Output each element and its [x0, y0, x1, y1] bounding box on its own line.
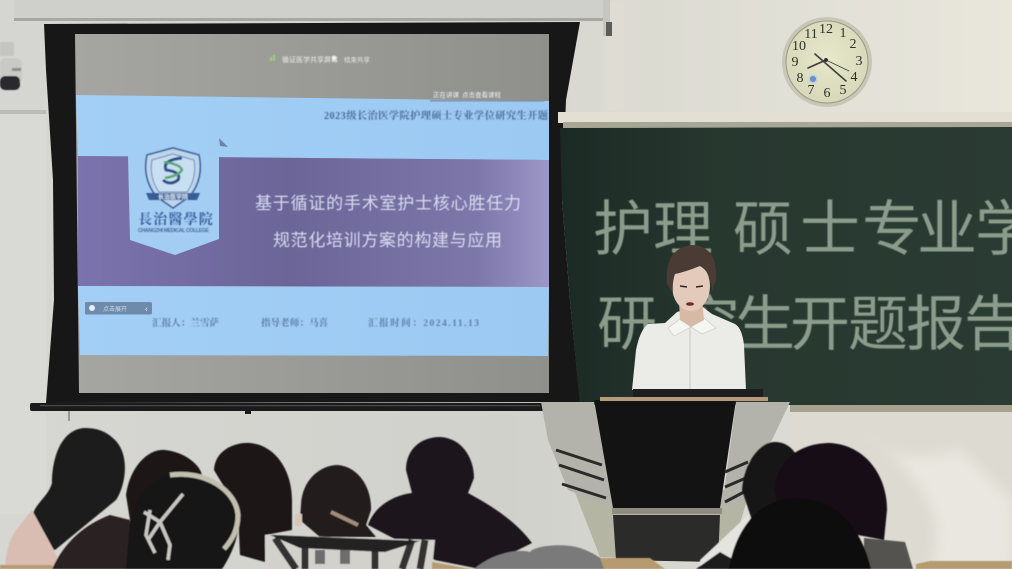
student left [32, 428, 125, 550]
projected slide [75, 34, 549, 393]
desk pieces [0, 558, 1012, 569]
slide purple band [78, 156, 549, 287]
chalk writing [593, 181, 1012, 363]
student ponytail [300, 465, 376, 537]
clock numerals: 6 [824, 86, 830, 101]
wall clock [782, 17, 872, 107]
student plaid jacket [265, 535, 435, 569]
students right [742, 442, 800, 520]
slide grey area [75, 34, 549, 393]
meeting toolbar top: 循证医学共享屏幕 [282, 55, 338, 64]
clock numerals: 11 [804, 27, 818, 42]
student with dark hair [126, 450, 202, 520]
clock numerals: 9 [792, 55, 798, 70]
clock numerals: 8 [796, 71, 804, 86]
eyes and lips [680, 286, 703, 287]
lectern stand [574, 490, 750, 560]
blackboard [558, 112, 1012, 412]
student headband [126, 473, 238, 569]
presenter line: 汇报时间：2024.11.13 [368, 317, 479, 329]
tab labels [430, 90, 544, 102]
projector screen frame [44, 22, 580, 403]
logo shield [128, 148, 219, 255]
school emblem: 长治医学院 [158, 193, 188, 201]
school name english: CHANGZHI MEDICAL COLLEGE [138, 228, 210, 234]
clock hands [808, 54, 849, 81]
student front right [729, 498, 871, 569]
hair [667, 245, 716, 294]
screen bottom bar [30, 403, 562, 421]
slide bottom blue band [78, 286, 549, 356]
projector screen housing [14, 0, 612, 36]
small triangle cursor [219, 138, 228, 147]
laptop on lectern [633, 389, 763, 397]
player control pill: 点击展开 [103, 305, 127, 313]
grey hood [474, 545, 613, 569]
clock numerals: 12 [819, 22, 833, 37]
slide main title: 基于循证的手术室护士核心胜任力 [255, 194, 521, 213]
student hoodie [368, 437, 532, 569]
clock numerals: 10 [792, 39, 806, 54]
lectern vents [556, 450, 748, 502]
student long hair [214, 443, 292, 562]
speaker [632, 245, 746, 390]
shirt [632, 305, 746, 390]
security camera [0, 42, 22, 90]
slide main title [255, 194, 521, 250]
player control pill: ‹ [145, 304, 148, 314]
presenter line [152, 317, 479, 329]
slide main title: 规范化培训方案的构建与应用 [273, 231, 502, 250]
school name: 長治醫學院 [138, 211, 214, 228]
player control pill [85, 302, 152, 314]
tab labels: 正在讲课 [433, 90, 460, 99]
lectern right panel [722, 402, 790, 508]
presenter line: 指导老师：马喜 [261, 317, 329, 329]
presenter line: 汇报人：兰雪萨 [152, 317, 220, 329]
clock numerals: 2 [850, 37, 856, 52]
neck and face [679, 300, 704, 327]
meeting toolbar top: 结束共享 [344, 55, 370, 64]
clock numerals: 5 [840, 83, 846, 98]
lectern centre [594, 400, 736, 508]
clock numerals: 4 [850, 70, 858, 85]
audience [0, 428, 1012, 569]
meeting toolbar top [270, 55, 370, 64]
clock numerals: 1 [840, 26, 846, 41]
clock numerals [792, 22, 862, 101]
clock numerals: 3 [856, 54, 862, 69]
clock numerals: 7 [808, 83, 814, 98]
slide top blue band [76, 95, 549, 160]
slide top title: 2023级长治医学院护理硕士专业学位研究生开题 [324, 109, 549, 122]
lectern lower dark panel [613, 515, 720, 562]
lectern [541, 389, 790, 562]
lectern left panel [541, 402, 613, 508]
chalk writing: 研究生开题报告 [597, 276, 1012, 363]
tab labels: 点击查看课程 [462, 90, 502, 99]
